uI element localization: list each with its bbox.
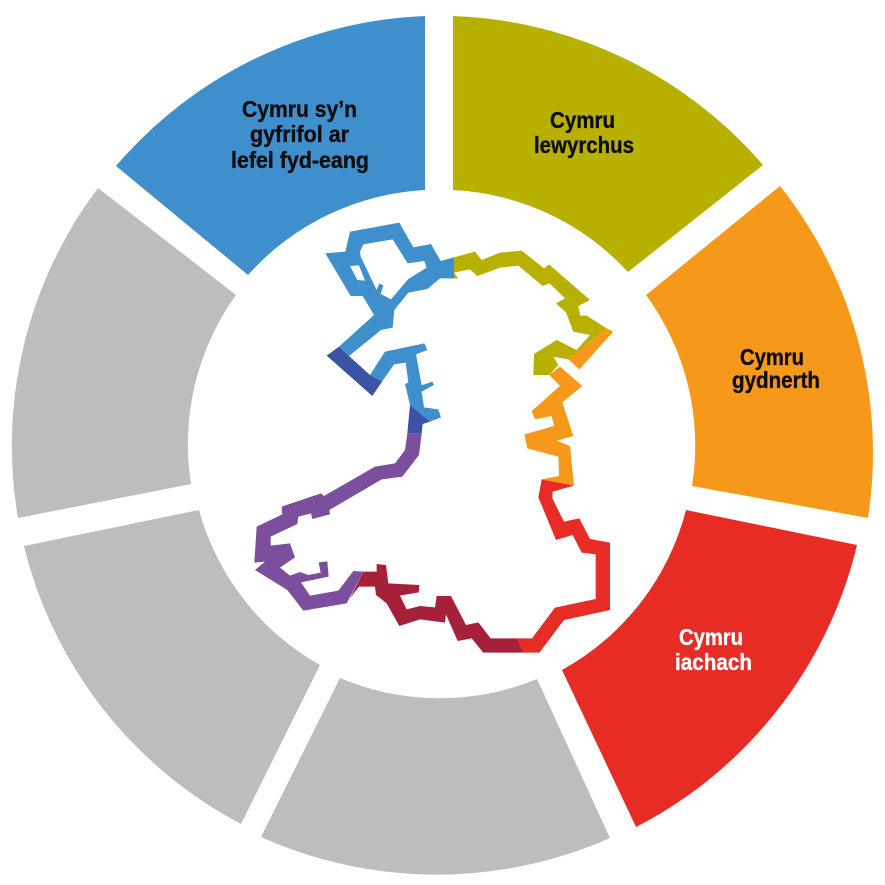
outline section: dark blue coast pieces: [327, 347, 430, 433]
outline section: purple south-west: [254, 433, 422, 611]
label: Cymru lewyrchus: [534, 107, 634, 158]
label: Cymru gydnerth: Cymru: [740, 344, 804, 370]
label: Cymru gydnerth: [732, 344, 820, 393]
label: Cymru lewyrchus: lewyrchus: [534, 132, 634, 158]
label: Cymru sy'n gyfrifol ar lefel fyd-eang: lefel fyd-eang: [231, 147, 369, 173]
outline section: red south-east: [517, 479, 610, 653]
label: Cymru iachach: [675, 624, 752, 675]
label: Cymru sy'n gyfrifol ar lefel fyd-eang: Cymru sy’n: [242, 96, 357, 122]
panel: grey lower-left segment: [24, 510, 320, 824]
panel: grey upper-left segment: [12, 188, 236, 518]
panel: global responsibility segment: [116, 16, 425, 275]
label: Cymru gydnerth: gydnerth: [732, 367, 820, 393]
label: Cymru sy'n gyfrifol ar lefel fyd-eang: [231, 96, 369, 173]
label: Cymru iachach: iachach: [675, 649, 752, 675]
outline section: blue west coast: [370, 343, 441, 422]
map: outline of Wales: [254, 223, 613, 653]
label: Cymru lewyrchus: Cymru: [550, 107, 615, 133]
label: Cymru iachach: Cymru: [679, 624, 743, 650]
outline section: olive north coast: [454, 251, 607, 375]
panel: healthier segment: [562, 510, 857, 827]
panel: grey bottom segment: [261, 678, 610, 875]
panel: resilient segment: [646, 186, 873, 518]
panel: prosperous segment: [453, 16, 763, 272]
outline section: blue north-west: [325, 223, 454, 356]
label: Cymru sy'n gyfrifol ar lefel fyd-eang: gyfrifol ar: [250, 121, 349, 147]
outline section: orange border: [524, 328, 613, 486]
outline section: crimson south coast: [350, 564, 523, 653]
